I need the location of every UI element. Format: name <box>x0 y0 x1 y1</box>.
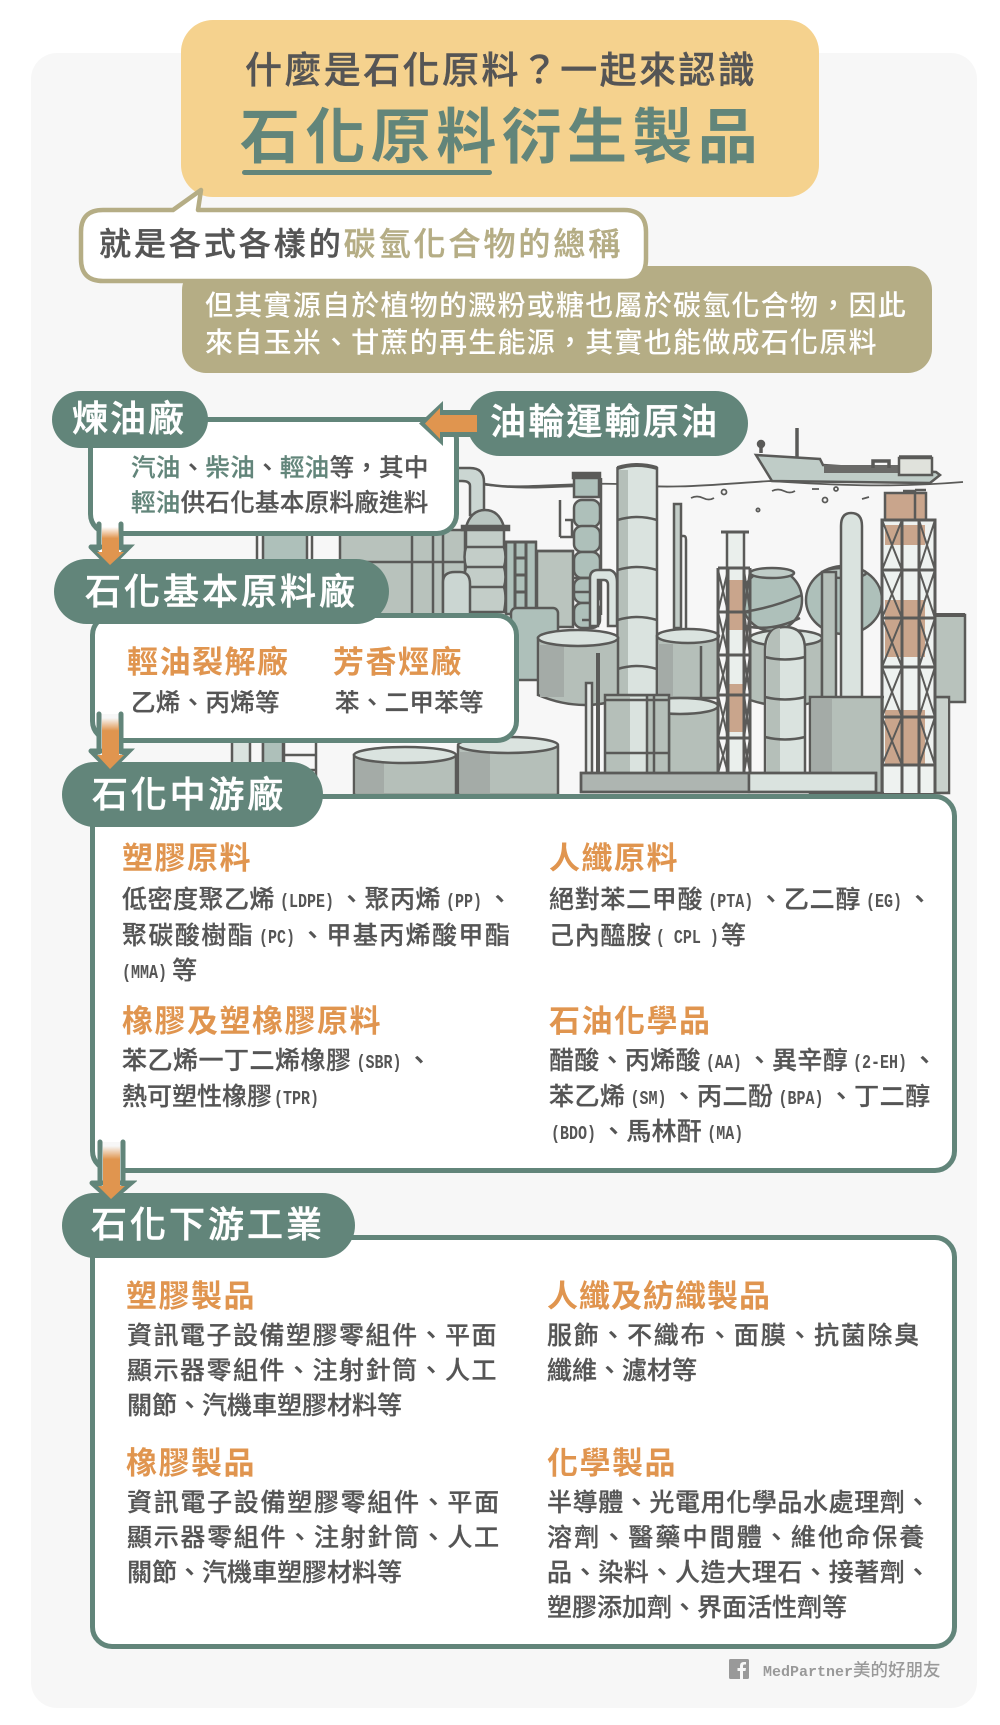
explanation text: 來自玉米、甘蔗的再生能源，其實也能做成石化原料 <box>205 327 878 358</box>
text: naphtha cracker: 乙烯、丙烯等 <box>131 690 280 717</box>
downstream: fibre products heading: 人纖及紡織製品 <box>547 1279 771 1314</box>
icon: facebook <box>729 1659 749 1679</box>
downstream: plastic products text: 關節、汽機車塑膠材料等 <box>127 1392 402 1420</box>
title line 1: 什麼是石化原料？一起來認識 <box>245 50 757 91</box>
midstream: petrochemicals text: 苯乙烯 、丙二酚 、丁二醇 <box>549 1082 931 1110</box>
title underline <box>242 170 492 175</box>
midstream: rubber text: (TPR) <box>274 1088 319 1110</box>
midstream: petrochemicals heading: 石油化學品 <box>549 1004 712 1039</box>
box: downstream <box>90 1235 957 1649</box>
refinery text: 輕油供石化基本原料廠進料 <box>131 490 429 517</box>
midstream: plastics feedstock heading: 塑膠原料 <box>122 841 252 876</box>
midstream: petrochemicals text: (2-EH) <box>853 1052 907 1075</box>
pill label: tanker transport: 油輪運輸原油 <box>490 401 719 442</box>
footer credit: MedPartner美的好朋友 <box>763 1660 941 1681</box>
midstream: petrochemicals text: 醋酸、丙烯酸 、異辛醇 、 <box>549 1047 937 1075</box>
pill: basic feedstock <box>54 559 389 624</box>
pill label: refinery: 煉油廠 <box>72 398 186 439</box>
midstream: rubber text <box>122 1047 432 1110</box>
midstream: plastics feedstock text: 低密度聚乙烯 、聚丙烯 、 <box>122 886 513 914</box>
teal rounded block <box>511 608 558 680</box>
midstream: rubber feedstock heading: 橡膠及塑橡膠原料 <box>122 1004 382 1039</box>
dome column and pipes <box>443 468 573 627</box>
midstream: synthetic fibre text <box>549 886 933 950</box>
refinery text <box>131 454 429 517</box>
midstream: synthetic fibre text: 己內醯胺 等 <box>549 922 747 950</box>
downstream: chemical products heading: 化學製品 <box>547 1446 677 1481</box>
arrow: feedstock to midstream <box>88 712 135 769</box>
arrow: tanker to refinery <box>419 401 477 446</box>
pill label: basic feedstock: 石化基本原料廠 <box>85 571 358 612</box>
downstream: chemical products text <box>547 1489 931 1622</box>
sea line and bubbles <box>479 481 963 512</box>
refinery text: 汽油、柴油、輕油等，其中 <box>131 455 429 482</box>
lower-left tanks <box>354 737 558 795</box>
heading: naphtha cracker: 輕油裂解廠 <box>127 645 290 680</box>
downstream: rubber products heading: 橡膠製品 <box>126 1446 256 1481</box>
midstream: synthetic fibre feedstock heading: 人纖原料 <box>549 841 679 876</box>
background blocks left <box>232 530 465 795</box>
midstream: plastics feedstock text: (PP) <box>446 891 482 914</box>
midstream: plastics feedstock text: (PC) <box>259 927 295 949</box>
downstream: fibre products text: 服飾、不織布、面膜、抗菌除臭 <box>547 1322 921 1350</box>
downstream: fibre products text: 纖維、濾材等 <box>547 1357 697 1385</box>
downstream: chemical products text: 半導體、光電用化學品水處理劑、 <box>547 1489 931 1517</box>
downstream: rubber products text: 顯示器零組件、注射針筒、人工 <box>127 1524 501 1552</box>
downstream: rubber products text: 資訊電子設備塑膠零組件、平面 <box>127 1489 501 1517</box>
downstream: plastic products text: 資訊電子設備塑膠零組件、平面 <box>127 1322 498 1350</box>
storage tanks <box>538 629 822 774</box>
title line 2: 石化原料衍生製品 <box>240 104 763 171</box>
illustration: refinery and tanker <box>230 428 966 794</box>
big scaffold tower <box>882 490 935 793</box>
speech bubble <box>78 188 648 284</box>
downstream: rubber products text <box>127 1489 501 1587</box>
front bullet vessel <box>765 627 805 774</box>
midstream: rubber text: (SBR) <box>357 1052 402 1075</box>
pill label: midstream: 石化中游廠 <box>92 774 286 815</box>
text: aromatics: 苯、二甲苯等 <box>335 690 484 717</box>
midstream: plastics feedstock text: (LDPE) <box>280 891 334 914</box>
bubble text: 就是各式各樣的碳氫化合物的總稱 <box>99 226 623 262</box>
midstream: synthetic fibre text: ( CPL ) <box>656 927 719 949</box>
midstream: plastics feedstock text: 聚碳酸樹酯 、甲基丙烯酸甲酯 <box>122 922 511 950</box>
explanation text <box>205 290 907 358</box>
downstream: chemical products text: 塑膠添加劑、界面活性劑等 <box>547 1594 847 1622</box>
box: midstream <box>90 794 957 1173</box>
olive explanation panel <box>182 266 932 373</box>
segmented column <box>560 473 617 628</box>
right gray blocks <box>810 615 965 793</box>
explanation text: 但其實源自於植物的澱粉或糖也屬於碳氫化合物，因此 <box>205 290 907 321</box>
front process box <box>586 653 669 775</box>
scaffold tower with flue <box>718 532 750 775</box>
midstream: rubber text: 苯乙烯一丁二烯橡膠 、 <box>122 1047 432 1075</box>
title panel <box>181 20 819 197</box>
midstream: rubber text: 熱可塑性橡膠 <box>122 1082 272 1110</box>
pill: downstream <box>62 1193 355 1258</box>
midstream: petrochemicals text <box>549 1047 937 1146</box>
midstream: synthetic fibre text: 絕對苯二甲酸 、乙二醇 、 <box>549 886 933 914</box>
midstream: plastics feedstock text <box>122 886 513 985</box>
midstream: petrochemicals text: (MA) <box>707 1123 743 1146</box>
slender pipe and bullet tower <box>822 513 862 698</box>
arrow: midstream to downstream <box>90 1140 137 1199</box>
tanker ship <box>756 428 940 483</box>
small stack <box>674 504 686 628</box>
arrow: refinery to feedstock <box>88 522 135 565</box>
downstream: chemical products text: 溶劑、醫藥中間體、維他命保養 <box>547 1524 926 1552</box>
platform base <box>581 773 876 792</box>
pill: tanker transport <box>467 391 748 456</box>
pill: midstream <box>62 762 323 827</box>
midstream: petrochemicals text: 、馬林酐 <box>601 1118 702 1146</box>
pill: refinery <box>52 391 208 448</box>
downstream: rubber products text: 關節、汽機車塑膠材料等 <box>127 1559 402 1587</box>
downstream: chemical products text: 品、染料、人造大理石、接著劑、 <box>547 1559 931 1587</box>
downstream: plastic products text <box>127 1322 498 1420</box>
downstream: plastic products heading: 塑膠製品 <box>126 1279 256 1314</box>
heading: aromatics: 芳香烴廠 <box>333 645 463 680</box>
box: refinery <box>88 417 459 536</box>
downstream: plastic products text: 顯示器零組件、注射針筒、人工 <box>127 1357 498 1385</box>
midstream: petrochemicals text: (SM) <box>631 1088 667 1110</box>
midstream: plastics feedstock text: (MMA) <box>122 962 167 985</box>
midstream: synthetic fibre text: (PTA) <box>708 891 753 914</box>
pill label: downstream: 石化下游工業 <box>91 1204 325 1245</box>
downstream: fibre products text <box>547 1322 921 1385</box>
box: basic feedstock <box>90 613 519 743</box>
spheres <box>742 566 882 634</box>
tall tower <box>618 465 657 700</box>
midstream: synthetic fibre text: (EG) <box>866 891 902 914</box>
midstream: petrochemicals text: (BDO) <box>551 1123 596 1146</box>
midstream: petrochemicals text: (AA) <box>706 1052 742 1075</box>
midstream: plastics feedstock text: 等 <box>172 957 198 985</box>
midstream: petrochemicals text: (BPA) <box>779 1088 824 1110</box>
